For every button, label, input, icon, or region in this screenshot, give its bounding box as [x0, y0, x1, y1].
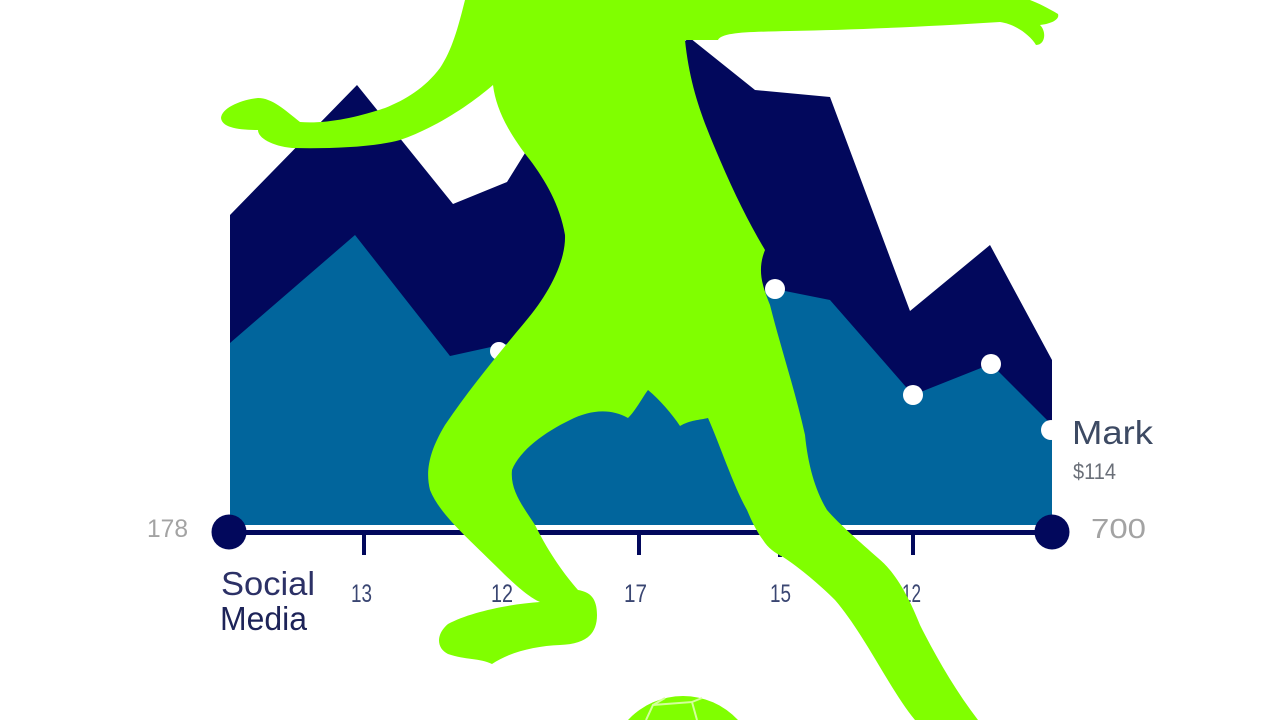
x axis tick labels	[351, 580, 921, 608]
axis end value: 700	[1091, 513, 1146, 544]
soccer ball	[628, 696, 738, 720]
label: mark: Mark	[1072, 414, 1154, 451]
axis start value: 178	[147, 515, 188, 543]
x axis tick labels: 12	[902, 580, 921, 608]
x axis	[212, 514, 1070, 557]
x axis tick labels: 13	[351, 580, 372, 608]
soccer player silhouette	[221, 0, 1058, 720]
label: social media: Media	[220, 600, 308, 637]
data point markers	[490, 279, 1061, 440]
x axis tick labels: 15	[770, 580, 791, 608]
x axis tick labels: 17	[624, 580, 647, 608]
x axis tick labels: 12	[491, 580, 513, 608]
blue area series	[230, 235, 1052, 525]
area chart	[230, 38, 1061, 525]
label: social media: Social	[221, 565, 315, 602]
label: mark value: $114	[1073, 459, 1116, 484]
navy area series	[230, 38, 1052, 525]
